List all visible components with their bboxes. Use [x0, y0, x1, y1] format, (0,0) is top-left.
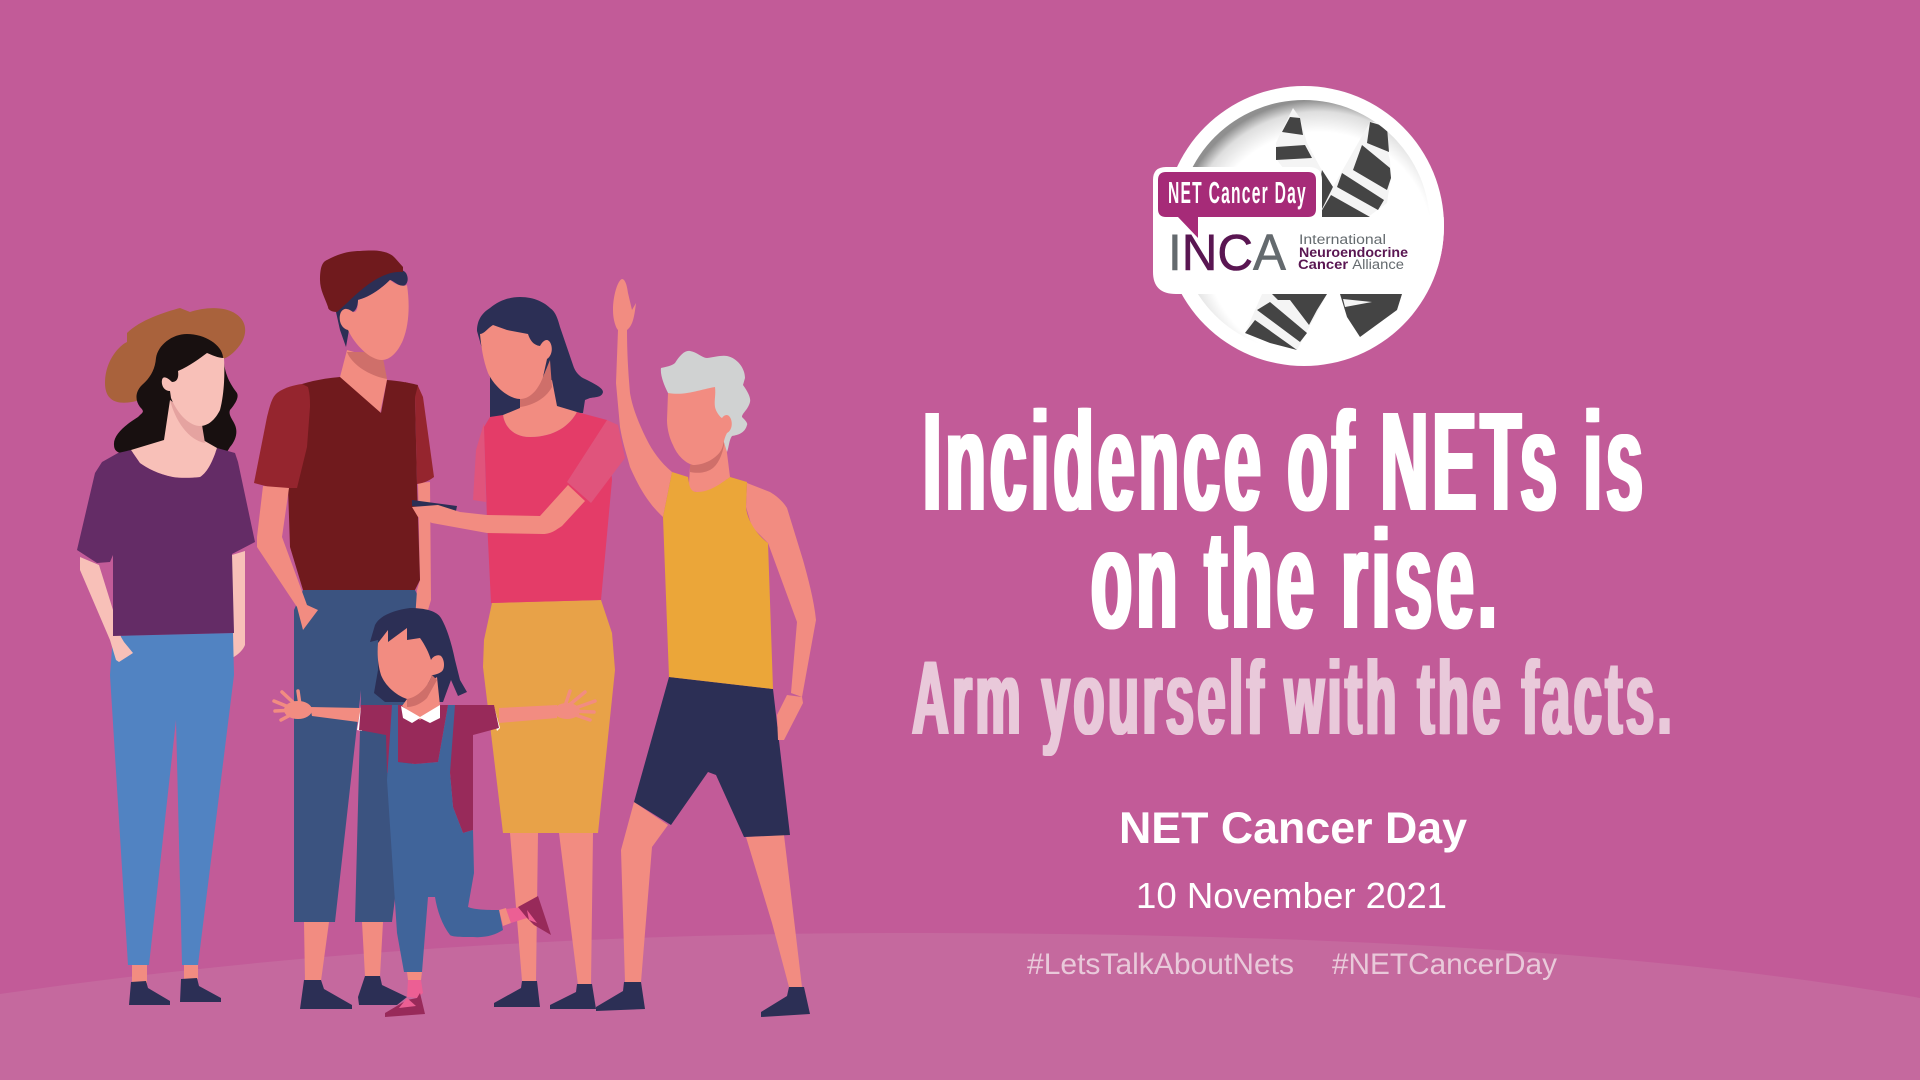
figure: child [274, 608, 595, 1017]
hair [477, 297, 603, 417]
right sleeve [567, 420, 625, 503]
raised arm and hand [613, 279, 672, 517]
legs [510, 833, 593, 985]
neck [340, 350, 387, 413]
right leg [746, 835, 802, 987]
shoe details [399, 910, 537, 1008]
left leg [621, 802, 668, 982]
speech bubble [1158, 172, 1316, 238]
figure: woman with hat [77, 308, 255, 1005]
trousers [294, 590, 425, 922]
figure: woman in pink top [412, 297, 625, 1009]
event date: 10 November 2021 [1136, 875, 1447, 916]
shoes [494, 981, 596, 1009]
face [480, 325, 552, 399]
hand left [274, 691, 300, 720]
alliance name [1298, 232, 1409, 272]
bubble text: NET Cancer Day [1168, 175, 1307, 210]
INCA wordmark: INCA [1168, 224, 1286, 281]
neck [503, 380, 577, 437]
arm right [499, 705, 557, 723]
hair [114, 334, 238, 453]
right arm [415, 482, 431, 620]
shirt [288, 377, 420, 590]
shoes [385, 896, 551, 1017]
left arm and hand [80, 557, 133, 662]
figure: man with beanie [254, 251, 434, 1009]
logo badge [1153, 86, 1444, 366]
legs [304, 922, 383, 981]
face [162, 353, 224, 426]
ankle [407, 908, 511, 980]
ground hill [0, 933, 1920, 1080]
tank top [663, 472, 773, 689]
skirt [483, 600, 615, 833]
shoes [300, 976, 407, 1009]
shirt back left [359, 705, 397, 773]
neck shadow [170, 400, 205, 443]
face [378, 628, 444, 699]
hashtag two: #NETCancerDay [1332, 948, 1557, 981]
alliance name: International [1299, 232, 1386, 247]
zebra ribbon [1245, 108, 1402, 350]
neck shadow [407, 675, 437, 707]
headline [923, 382, 1647, 658]
jeans [110, 633, 234, 965]
hashtag one: #LetsTalkAboutNets [1027, 948, 1294, 981]
left arm [257, 486, 318, 630]
white cuffs [357, 706, 500, 731]
inner disc [1178, 100, 1430, 352]
top [484, 412, 612, 603]
ankles [132, 965, 198, 983]
shoes [129, 978, 221, 1005]
face [340, 280, 409, 360]
right arm [232, 551, 245, 658]
back arm left [310, 707, 361, 722]
right sleeve [405, 382, 434, 484]
palm left [284, 701, 312, 719]
neck and chest [131, 400, 217, 478]
silver hair [661, 351, 750, 452]
shirt bib [398, 705, 448, 764]
socks [407, 907, 527, 998]
neck shadow [520, 360, 552, 407]
alliance name: Cancer Alliance [1298, 257, 1404, 272]
shorts [634, 677, 790, 837]
dungarees [387, 705, 503, 972]
neck shadow [690, 437, 725, 473]
collar [401, 705, 440, 723]
left sleeve [473, 423, 486, 502]
hair [336, 269, 408, 347]
hand [777, 695, 803, 740]
hat [105, 308, 245, 403]
hand right [565, 691, 595, 720]
neck shadow [347, 352, 387, 379]
neck [689, 437, 730, 492]
white ring [1164, 86, 1444, 366]
beanie [320, 251, 403, 312]
shirt right [448, 705, 499, 833]
white label [1153, 167, 1444, 294]
event name: NET Cancer Day [1119, 804, 1467, 853]
arm and hand [412, 485, 585, 534]
shirt [77, 448, 255, 636]
phone [412, 500, 457, 511]
left sleeve [254, 384, 310, 488]
alliance name: Neuroendocrine [1299, 245, 1409, 260]
hair [370, 608, 467, 702]
figure: older man waving [596, 279, 816, 1017]
palm right [554, 703, 580, 719]
neck [402, 677, 440, 720]
face [667, 387, 732, 465]
shoes [596, 982, 810, 1017]
right arm [746, 483, 816, 697]
